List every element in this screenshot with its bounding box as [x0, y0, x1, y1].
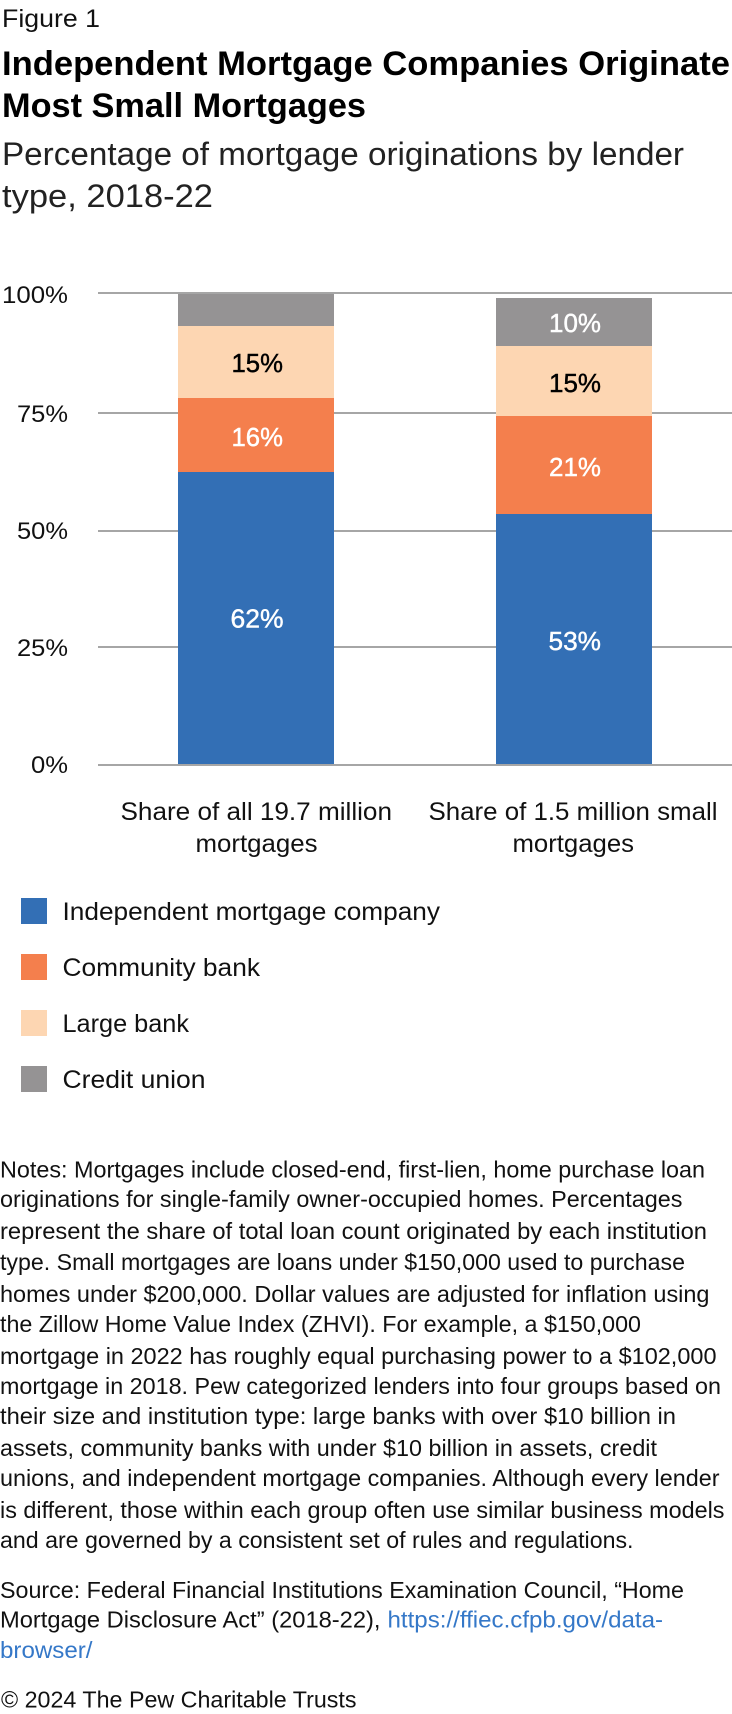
bar: all mortgages: 16% [232, 422, 283, 452]
notes: Notes: Mortgages include closed-end, first-lien, home purchase loan [0, 1156, 705, 1182]
bar: all mortgages: 15% [232, 348, 283, 378]
y axis labels: 25% [17, 635, 68, 662]
notes: mortgage in 2022 has roughly equal purchasing power to a $102,000 [0, 1343, 716, 1369]
bar: small mortgages: 53% [548, 626, 601, 656]
y axis labels: 0% [31, 752, 68, 779]
title: Most Small Mortgages [2, 87, 366, 125]
notes: is different, those within each group often use similar business models [0, 1497, 724, 1523]
source: Mortgage Disclosure Act” (2018-22), [0, 1606, 380, 1632]
notes: represent the share of total loan count originated by each institution [0, 1218, 707, 1244]
source: Source: Federal Financial Institutions Examination Council, “Home [0, 1577, 684, 1603]
x axis labels: Share of 1.5 million small [428, 798, 718, 826]
source [0, 1577, 684, 1663]
legend item: independent mortgage company: Independent mortgage company [62, 898, 441, 926]
notes: originations for single-family owner-occupied homes. Percentages [0, 1186, 682, 1212]
bar: all mortgages [178, 294, 334, 764]
bar: small mortgages [496, 298, 652, 764]
title [2, 45, 730, 125]
x axis labels: mortgages [512, 830, 634, 858]
notes: type. Small mortgages are loans under $150,000 used to purchase [0, 1249, 685, 1275]
legend item: large bank: Large bank [62, 1010, 189, 1038]
notes: mortgage in 2018. Pew categorized lenders into four groups based on [0, 1373, 721, 1399]
bar: small mortgages: 15% [549, 368, 601, 398]
notes: homes under $200,000. Dollar values are adjusted for inflation using [0, 1281, 710, 1307]
stacked bar chart [2, 282, 732, 858]
y axis labels: 75% [17, 401, 68, 428]
notes: their size and institution type: large banks with over $10 billion in [0, 1403, 676, 1429]
subtitle [2, 136, 684, 214]
notes: the Zillow Home Value Index (ZHVI). For example, a $150,000 [0, 1311, 641, 1337]
copyright: © 2024 The Pew Charitable Trusts [1, 1686, 356, 1712]
notes: assets, community banks with under $10 billion in assets, credit [0, 1435, 658, 1461]
x axis labels [120, 798, 718, 858]
source: https://ffiec.cfpb.gov/data- [388, 1606, 663, 1632]
y axis labels: 50% [17, 518, 68, 545]
subtitle: type, 2018-22 [2, 178, 213, 214]
legend [21, 898, 441, 1094]
bar: all mortgages: 62% [230, 604, 284, 634]
bar: small mortgages: 10% [549, 308, 601, 338]
bar: small mortgages: 21% [549, 452, 601, 482]
notes: and are governed by a consistent set of rules and regulations. [0, 1527, 634, 1553]
source: browser/ [0, 1637, 93, 1663]
x axis labels: mortgages [196, 830, 318, 858]
title: Independent Mortgage Companies Originate [2, 45, 730, 83]
subtitle: Percentage of mortgage originations by lender [2, 136, 684, 172]
figure label: Figure 1 [2, 5, 100, 33]
legend item: community bank: Community bank [62, 954, 261, 982]
notes: unions, and independent mortgage companies. Although every lender [0, 1465, 720, 1491]
y axis labels: 100% [2, 282, 68, 309]
legend item: credit union: Credit union [62, 1066, 206, 1094]
y axis labels [2, 282, 68, 779]
notes [0, 1156, 724, 1553]
x axis labels: Share of all 19.7 million [120, 798, 392, 826]
